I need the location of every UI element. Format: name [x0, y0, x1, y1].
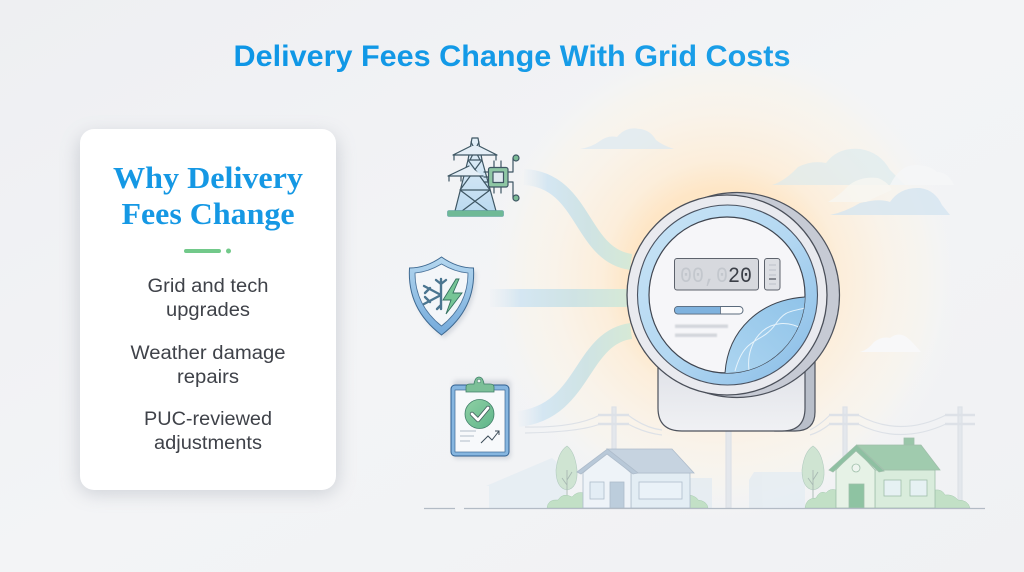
left tree [556, 446, 577, 508]
title: Delivery Fees Change With Grid Costs [234, 40, 791, 73]
list item: grid and tech upgrades: upgrades [166, 300, 250, 321]
list item: PUC-reviewed adjustments [144, 409, 272, 454]
display side indicator [764, 258, 780, 290]
list item: PUC-reviewed adjustments: adjustments [154, 433, 262, 454]
wave window [724, 296, 805, 373]
panel heading: Fees Change [122, 196, 294, 231]
icon: transmission tower with chip [448, 138, 519, 216]
village scene [424, 407, 985, 508]
ground line [424, 508, 985, 510]
meter text lines [675, 324, 728, 337]
heading accent divider [184, 248, 231, 254]
panel: why delivery fees change [78, 129, 338, 494]
list item: weather damage repairs [130, 343, 286, 388]
list item: PUC-reviewed adjustments: PUC-reviewed [144, 409, 272, 430]
bushes [547, 489, 970, 508]
right tree [802, 446, 824, 508]
digital display: 00,020 [680, 264, 752, 289]
panel heading [113, 160, 304, 231]
list item: grid and tech upgrades: Grid and tech [148, 276, 268, 297]
electric meter [627, 192, 840, 431]
background houses [486, 458, 805, 508]
utility poles and wires [525, 407, 975, 508]
meter body [627, 192, 840, 398]
list item: weather damage repairs: repairs [177, 367, 239, 388]
icon: shield with snowflake and bolt [409, 257, 476, 338]
right house [829, 438, 940, 508]
panel heading: Why Delivery [113, 160, 304, 195]
left house [577, 449, 694, 508]
meter base [658, 360, 815, 431]
arrow: grid upgrades ribbon [524, 177, 631, 262]
list item: grid and tech upgrades [148, 276, 268, 321]
progress bar [674, 306, 743, 314]
list item: weather damage repairs: Weather damage [130, 343, 286, 364]
arrow: adjustments ribbon [518, 331, 631, 419]
clouds [580, 128, 954, 352]
arrow: weather repairs ribbon [490, 289, 630, 307]
icon: clipboard with check and chart [451, 377, 511, 459]
